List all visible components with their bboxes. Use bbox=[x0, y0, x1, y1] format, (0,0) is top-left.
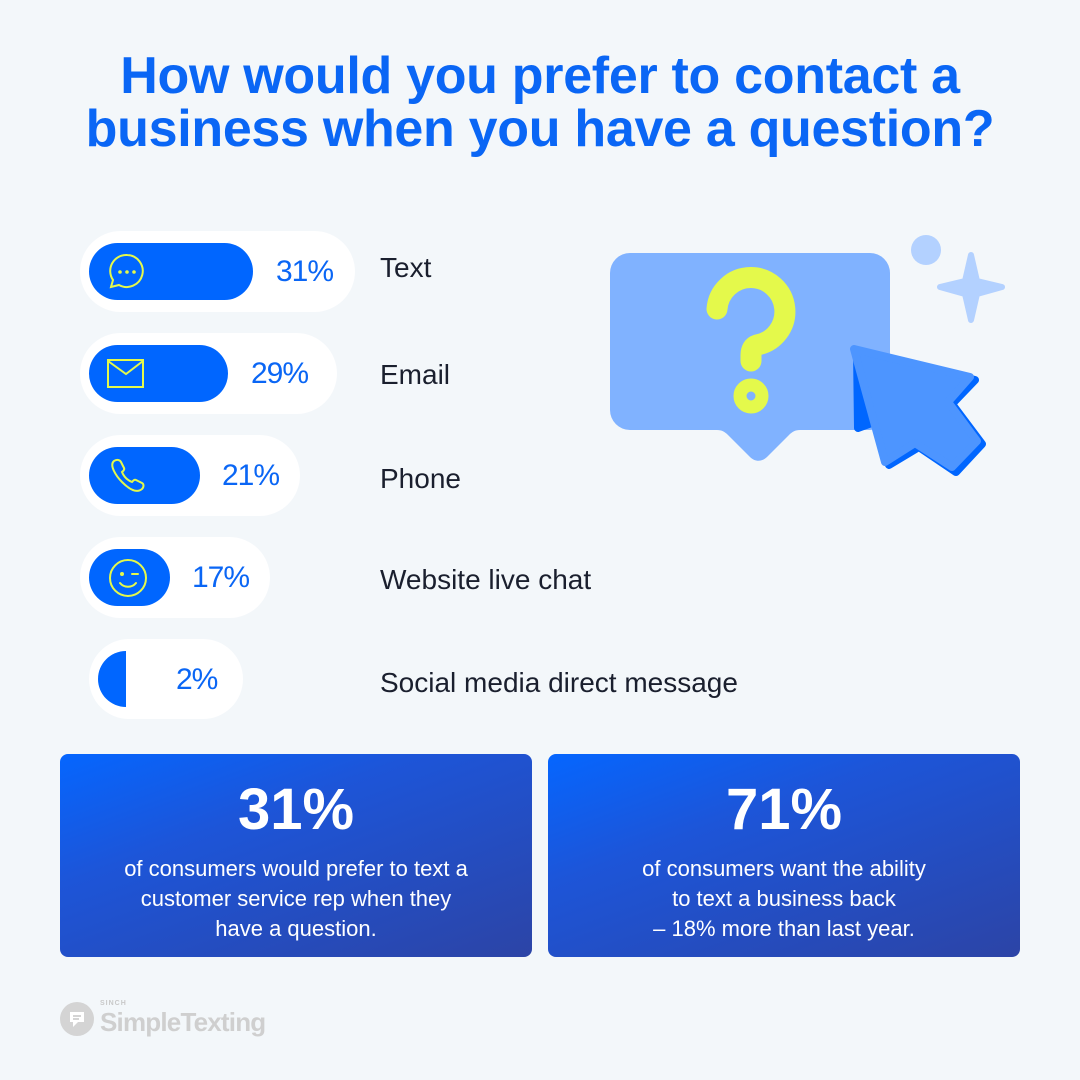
logo: SINCH bbox=[100, 1000, 127, 1007]
title bbox=[86, 47, 994, 158]
bar: email bbox=[89, 345, 228, 402]
label: live chat: Website live chat bbox=[380, 564, 591, 595]
row: phone 21% bbox=[80, 435, 300, 516]
value: 2% bbox=[176, 663, 217, 696]
illustration: question bubble with cursor bbox=[610, 235, 1005, 476]
question mark bbox=[717, 278, 785, 407]
stat card: 71%: – 18% more than last year. bbox=[653, 916, 915, 941]
stat card: 71%: of consumers want the ability bbox=[642, 856, 926, 881]
bubble bbox=[610, 253, 890, 461]
bar: phone bbox=[89, 447, 200, 504]
value: 17% bbox=[192, 561, 249, 594]
title: How would you prefer to contact a bbox=[120, 47, 960, 105]
label: phone: Phone bbox=[380, 463, 461, 494]
logo: SimpleTexting bbox=[100, 1007, 265, 1037]
bar: social bbox=[98, 651, 126, 707]
title: business when you have a question? bbox=[86, 100, 994, 158]
cursor bbox=[854, 349, 982, 472]
value: 29% bbox=[251, 357, 308, 390]
stat card: 71% bbox=[548, 754, 1020, 957]
sparkle dot bbox=[911, 235, 941, 265]
row: social 2% bbox=[89, 639, 243, 719]
stat card: 71%: to text a business back bbox=[672, 886, 896, 911]
sparkle star bbox=[940, 255, 1002, 320]
row: email 29% bbox=[80, 333, 337, 414]
row: text 31% bbox=[80, 231, 355, 312]
value: 21% bbox=[222, 459, 279, 492]
bar: text bbox=[89, 243, 253, 300]
label: text: Text bbox=[380, 252, 431, 283]
stat card: 31%: of consumers would prefer to text a bbox=[124, 856, 468, 881]
stat card: 31% bbox=[60, 754, 532, 957]
logo bbox=[60, 1000, 265, 1037]
row: live chat 17% bbox=[80, 537, 270, 618]
stat card: 31%: customer service rep when they bbox=[141, 886, 451, 911]
stat card: 31%: have a question. bbox=[215, 916, 377, 941]
value: 31% bbox=[276, 255, 333, 288]
stat card: 71%: 71% bbox=[726, 777, 842, 842]
stat card: 31%: 31% bbox=[238, 777, 354, 842]
bar: live chat bbox=[89, 549, 170, 606]
label: social: Social media direct message bbox=[380, 667, 738, 698]
label: email: Email bbox=[380, 359, 450, 390]
